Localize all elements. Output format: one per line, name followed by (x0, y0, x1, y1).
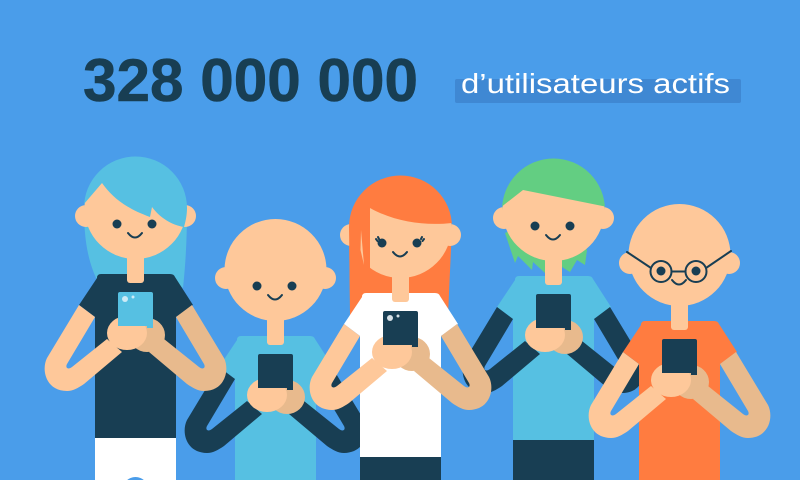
face (112, 220, 156, 238)
head (340, 176, 461, 278)
neck (267, 307, 284, 345)
green fringe (502, 158, 605, 210)
hands (107, 316, 165, 352)
hands (651, 363, 709, 399)
neck (671, 292, 688, 330)
back hair spikes (505, 212, 587, 273)
person 1: cyan hair, navy tee, white trousers (45, 156, 226, 480)
hands (247, 378, 305, 414)
t-shirt (344, 293, 458, 457)
head (215, 219, 336, 321)
neck (545, 247, 562, 285)
headline number: 328 000 000 (83, 47, 418, 114)
arms (185, 367, 366, 453)
hair highlight (360, 230, 364, 265)
phone (536, 294, 571, 330)
phone (383, 311, 418, 347)
phone reflections (122, 296, 134, 302)
trousers (360, 449, 441, 480)
arms (310, 324, 491, 410)
phone reflections (387, 314, 400, 321)
t-shirt (79, 274, 193, 438)
t-shirt (497, 276, 611, 440)
fringe (84, 156, 187, 227)
face (252, 282, 296, 300)
hands (372, 335, 430, 371)
back hair (84, 208, 187, 288)
arms (45, 305, 226, 391)
t-shirt (219, 336, 333, 480)
arms (463, 307, 644, 393)
neck (392, 264, 409, 302)
head (493, 159, 614, 261)
person 4: green hair, cyan tee, navy sleeves (463, 158, 644, 480)
phone (258, 354, 293, 390)
head (619, 204, 740, 306)
head (75, 157, 196, 259)
neck (127, 245, 144, 283)
trousers (95, 430, 176, 480)
person 3: orange hair, white tee, navy trousers (310, 176, 491, 480)
fringe and side hair (349, 176, 452, 300)
arms (589, 352, 770, 438)
trouser gap (122, 477, 148, 480)
t-shirt (623, 321, 737, 480)
trousers (513, 432, 594, 480)
face with lashes (376, 237, 424, 256)
caption: active users with highlight: d’utilisateurs actifs (461, 68, 730, 99)
person 2: bald, cyan tee, navy sleeves (185, 219, 366, 480)
back hair (349, 227, 452, 315)
hands (525, 318, 583, 354)
face (656, 266, 700, 284)
glasses (627, 251, 731, 282)
phone (118, 292, 153, 328)
face (530, 222, 574, 240)
person 5: bald with glasses, orange tee (589, 204, 770, 480)
phone (662, 339, 697, 375)
